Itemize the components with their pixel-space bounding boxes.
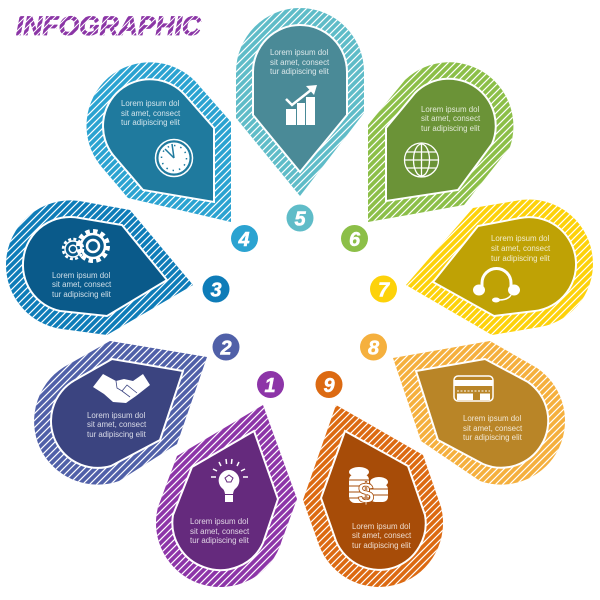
panel: step 9 xyxy=(303,405,443,587)
panel: step 8 xyxy=(393,341,565,485)
text block: tur adipiscing elit xyxy=(52,290,112,299)
text block: tur adipiscing elit xyxy=(190,536,250,545)
text block: tur adipiscing elit xyxy=(463,433,523,442)
badge: 4: 4 xyxy=(237,229,250,251)
text block: tur adipiscing elit xyxy=(491,254,551,263)
panel: step 7 xyxy=(406,199,593,335)
badge: 8: 8 xyxy=(368,338,380,360)
icon: handshake xyxy=(93,374,150,403)
badge: 7 xyxy=(370,276,397,302)
panel: step 3 xyxy=(6,200,193,335)
text block: Lorem ipsum dol xyxy=(87,411,146,420)
text block: sit amet, consect xyxy=(190,527,250,536)
panel: step 2 xyxy=(34,341,207,485)
title: INFOGRAPHIC xyxy=(16,11,201,41)
badge: 2 xyxy=(212,334,240,360)
text block: sit amet, consect xyxy=(491,244,551,253)
text block: sit amet, consect xyxy=(270,58,330,67)
icon: gears xyxy=(63,231,108,261)
text block: sit amet, consect xyxy=(463,424,523,433)
badge: 3 xyxy=(202,276,230,302)
text block: tur adipiscing elit xyxy=(270,67,330,76)
text block: Lorem ipsum dol xyxy=(270,48,329,57)
badge: 5: 5 xyxy=(294,208,306,230)
text block: Lorem ipsum dol xyxy=(52,271,111,280)
badge: 1 xyxy=(257,371,284,398)
text block: sit amet, consect xyxy=(421,114,481,123)
text block: Lorem ipsum dol xyxy=(491,234,550,243)
icon: coins: $ xyxy=(358,478,374,510)
text block: Lorem ipsum dol xyxy=(463,414,522,423)
text block: tur adipiscing elit xyxy=(121,118,181,127)
badge: 2: 2 xyxy=(219,338,232,360)
text block: sit amet, consect xyxy=(121,109,181,118)
badge: 6 xyxy=(341,225,368,252)
text block: Lorem ipsum dol xyxy=(190,517,249,526)
icon: clock xyxy=(156,140,192,176)
badge: 1: 1 xyxy=(264,375,276,397)
text block: sit amet, consect xyxy=(352,531,412,540)
badge: 6: 6 xyxy=(349,229,361,251)
icon: globe xyxy=(404,143,438,177)
icon: light bulb xyxy=(211,459,248,502)
badge: 5 xyxy=(286,204,314,232)
text block: tur adipiscing elit xyxy=(421,124,481,133)
text block: Lorem ipsum dol xyxy=(121,99,180,108)
icon: growth chart xyxy=(286,85,317,125)
text block: tur adipiscing elit xyxy=(352,541,412,550)
panel: step 1 xyxy=(156,405,297,587)
badge: 3: 3 xyxy=(210,280,222,302)
panel: step 6 xyxy=(368,62,513,222)
text block: tur adipiscing elit xyxy=(87,430,147,439)
panel: step 5 xyxy=(236,8,364,196)
badge: 7: 7 xyxy=(378,280,390,302)
badge: 9: 9 xyxy=(323,375,335,397)
panel: step 4 xyxy=(87,62,231,222)
text block: Lorem ipsum dol xyxy=(352,522,411,531)
text block: sit amet, consect xyxy=(87,420,147,429)
badge: 4 xyxy=(231,225,258,252)
icon: credit card xyxy=(454,376,493,401)
text block: sit amet, consect xyxy=(52,280,112,289)
badge: 8 xyxy=(360,334,387,360)
badge: 9 xyxy=(316,371,342,398)
icon: headset xyxy=(473,268,520,302)
text block: Lorem ipsum dol xyxy=(421,105,480,114)
icon: coins xyxy=(349,467,388,510)
